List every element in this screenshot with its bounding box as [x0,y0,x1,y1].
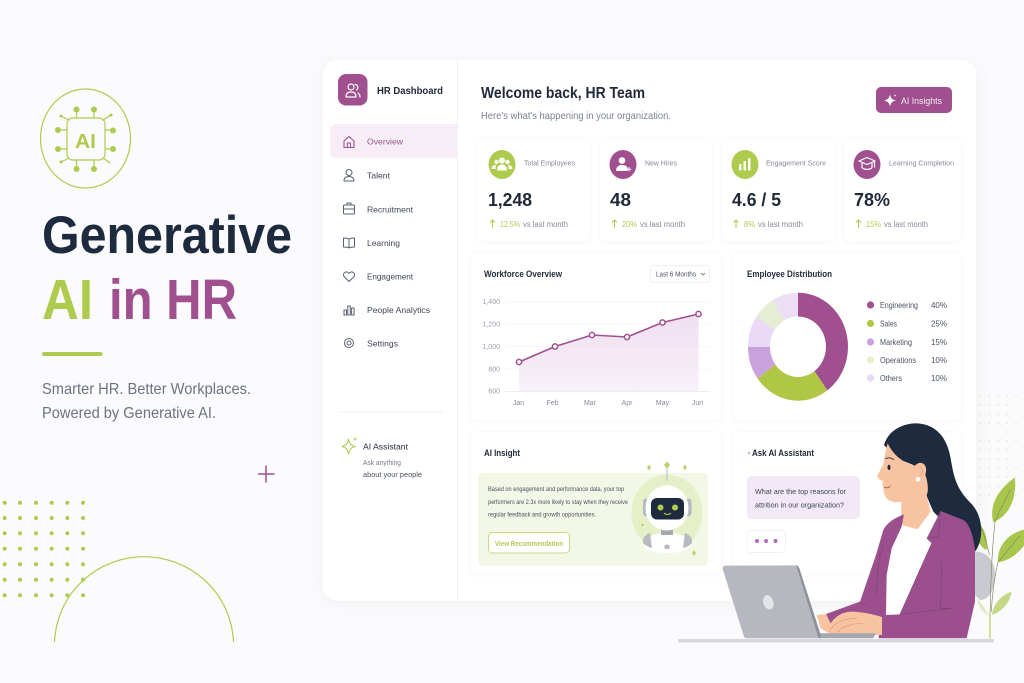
decorative arc [54,557,234,642]
panel: employee distribution [733,253,961,420]
title: Generative [42,206,292,265]
panel: workforce overview [471,253,721,420]
card: engagement score: 4.6 / 5 [732,189,781,210]
chat bubble: What are the top reasons for [755,487,846,496]
laptop [820,633,876,638]
tagline: Powered by Generative AI. [42,405,216,422]
legend [867,301,947,383]
icon: AI chip badge: AI [75,131,96,153]
line chart: Jun [692,400,703,407]
panel: dashboard [323,60,976,601]
nav item: learning [344,238,400,248]
desk line [678,639,994,642]
heading: welcome: Welcome back, HR Team [481,85,645,102]
insight box [478,473,708,566]
donut chart [748,293,848,401]
legend: 10% [931,356,947,365]
card: new hires: vs last month [640,220,685,229]
icon: HR logo [338,74,368,106]
button: AI insights: AI Insights [901,96,943,106]
face and neck [877,443,931,535]
icon: robot [632,462,702,556]
legend: Others [880,374,902,383]
nav item: talent: Talent [367,170,391,180]
line chart [482,299,710,407]
line chart: 1,400 [482,299,500,306]
card: new hires: 48 [610,189,631,210]
typing indicator [747,530,786,552]
card: engagement score: vs last month [758,220,803,229]
legend: 25% [931,320,947,328]
nav item: settings: Settings [367,338,398,348]
card: learning completion: Learning Completion [889,158,954,168]
line chart: Jan [513,400,524,407]
legend: 15% [931,338,947,347]
card title: Ask AI Assistant [752,448,814,458]
legend: Marketing [880,338,912,347]
card: new hires [600,138,712,241]
legend: Engineering [880,301,918,310]
nav item: recruitment: Recruitment [367,204,414,214]
legend: 40% [931,301,947,310]
line chart: May [656,400,670,407]
dropdown: Last 6 Months [656,272,696,278]
card: engagement score: 8% [744,220,755,229]
hand [817,612,882,635]
panel: AI insight [471,432,721,573]
card: learning completion: vs last month [884,220,928,229]
card: engagement score: Engagement Score [766,158,826,168]
nav item: talent [344,170,391,181]
blazer [826,511,975,638]
button: view recommendation [488,532,570,553]
line chart: Feb [546,400,559,407]
insight text: regular feedback and growth opportunities. [488,512,596,518]
subheading: Here's what's happening in your organization. [481,110,671,122]
panel: sidebar [330,74,457,479]
title: AI [42,268,93,332]
card: engagement score [722,138,834,241]
title [42,206,292,332]
card: learning completion [844,138,961,241]
decorative dot grid right [976,392,1022,512]
button: view recommendation: View Recommendation [495,539,563,548]
button: AI insights [876,87,952,113]
title underline [42,352,102,356]
nav item: overview [330,124,457,158]
plus mark [258,466,274,482]
AI assistant promo: AI Assistant [363,442,409,452]
card title: AI Insight [484,448,520,458]
illustration: woman at laptop [723,423,981,638]
chart title: Employee Distribution [747,269,832,279]
AI assistant promo: Ask anything [363,460,401,467]
card: total employees [478,138,590,241]
hair [884,423,981,552]
legend: Sales [880,320,897,328]
nav item: people analytics: People Analytics [367,305,430,315]
chart title: Workforce Overview [484,269,563,279]
card: total employees: 12.5% [500,220,520,229]
nav item: engagement: Engagement [367,272,414,282]
tagline [42,381,251,422]
AI assistant promo [342,438,422,479]
title: in HR [109,268,237,332]
legend: Operations [880,356,916,365]
panel: ask AI assistant [733,432,961,573]
nav item: settings [344,338,398,348]
brand name: HR Dashboard [377,85,443,97]
insight text: Based on engagement and performance data, your top [488,486,624,493]
line chart: 800 [488,366,500,374]
card: learning completion: 15% [866,220,881,229]
illustration: plant [975,477,1024,638]
decorative dot grid left [3,501,85,597]
line chart: 1,000 [482,344,500,351]
chat bubble: attrition in our organization? [755,500,844,510]
line chart: Apr [622,400,633,407]
card: total employees: Total Employees [524,158,575,168]
nav item: learning: Learning [367,238,400,248]
AI assistant promo: about your people [363,472,422,479]
card: new hires: New Hires [645,158,677,168]
tagline: Smarter HR. Better Workplaces. [42,381,251,398]
nav item: engagement [344,272,414,282]
nav item: recruitment [344,203,414,214]
card: total employees: vs last month [523,220,568,229]
line chart: 1,200 [482,322,500,328]
icon: AI chip badge [40,89,130,188]
line chart: 600 [488,388,500,396]
dropdown [650,266,710,282]
card: new hires: 20% [622,220,637,229]
legend: 10% [931,374,947,383]
shirt [887,525,921,615]
card: learning completion: 78% [854,189,890,210]
insight text [488,486,628,518]
nav item: overview: Overview [367,136,404,146]
card: total employees: 1,248 [488,189,532,210]
chat bubble [747,476,860,519]
line chart: Mar [584,400,597,407]
insight text: performers are 2.3x more likely to stay when they receive [488,499,628,506]
